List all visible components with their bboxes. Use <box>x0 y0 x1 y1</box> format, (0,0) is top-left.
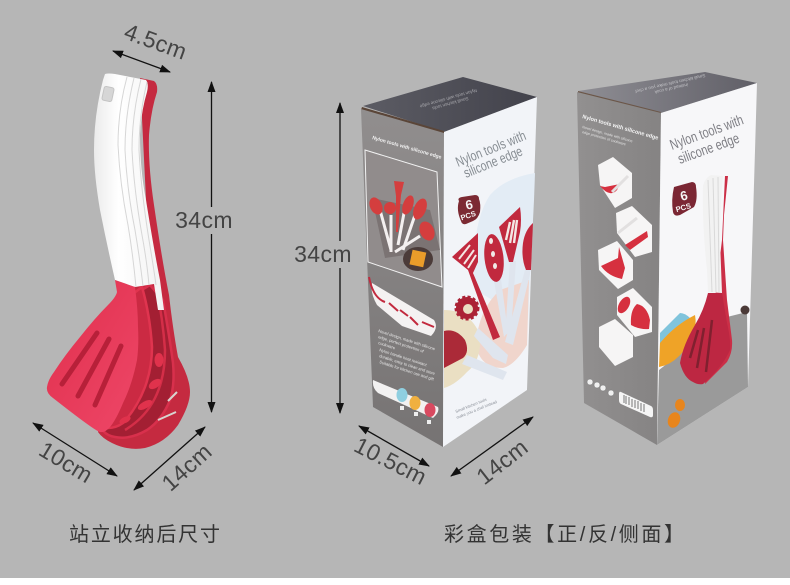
front utensils <box>444 207 533 380</box>
badge shape <box>672 182 697 216</box>
label: 10.5cm <box>350 432 431 490</box>
top line 2: Small kitchen tools <box>431 96 469 111</box>
blue leaf <box>660 313 690 350</box>
hexagon 3 <box>598 241 633 289</box>
dimension: 4.5cm width <box>113 18 191 72</box>
pale blue circle <box>474 173 535 320</box>
handle grooves <box>708 177 719 292</box>
small squares <box>400 406 431 424</box>
solid handle <box>505 270 531 345</box>
arrow <box>339 103 341 413</box>
big spoon handle <box>462 355 507 380</box>
top line 1: Small kitchen tools make you a chef <box>634 73 706 94</box>
left face heading: Nylon tools with silicone edge <box>371 135 442 161</box>
barcode label <box>619 392 653 417</box>
gear hole <box>463 304 473 314</box>
box front face <box>443 97 537 447</box>
left face subtext <box>582 125 633 146</box>
badge 6: 6 <box>679 187 689 204</box>
arrow <box>210 82 212 412</box>
peach blob <box>476 280 529 368</box>
dimension: 10.5cm <box>350 426 431 490</box>
left face heading: Nylon tools with silicone edge <box>581 114 659 142</box>
heading line 1: Nylon tools with <box>453 128 528 170</box>
label: 34cm <box>294 241 352 267</box>
heading line 2: silicone edge <box>461 143 525 181</box>
arrow <box>33 423 117 476</box>
badge PCS: PCS <box>460 209 477 222</box>
hexagon 1 <box>598 157 632 208</box>
step strip <box>372 283 436 336</box>
utensil heads <box>367 181 438 243</box>
colour box: back view <box>577 72 757 445</box>
caption left: 站立收纳后尺寸 <box>69 523 220 546</box>
arrow <box>134 427 205 490</box>
badge shape <box>458 195 480 224</box>
top faint text <box>634 73 706 95</box>
line 1: Small kitchen tools <box>455 397 487 414</box>
heading <box>667 111 746 167</box>
gear handle <box>474 328 508 364</box>
upper fruit <box>675 399 685 411</box>
icon strip <box>373 380 438 418</box>
line: edge, perfect protection of <box>378 334 425 354</box>
front slotted spatula <box>47 280 138 432</box>
gap <box>172 207 234 234</box>
white handles stack <box>94 74 164 310</box>
coloured icons <box>396 388 436 424</box>
product: stacked utensils <box>47 74 190 449</box>
stone surface <box>657 312 748 445</box>
hang hole <box>102 86 114 102</box>
arrow <box>113 51 170 72</box>
description text <box>378 328 436 382</box>
orange icon <box>410 396 420 410</box>
line: Suitable for kitchen use and gift <box>379 359 435 382</box>
dimension: 14cm <box>134 427 217 496</box>
step strip red strokes <box>369 277 434 327</box>
dimension: 14cm box <box>451 417 533 490</box>
handle layer grooves <box>118 77 156 287</box>
colour box: front view <box>361 77 537 447</box>
hexagon panels <box>598 157 652 366</box>
line: cookware <box>378 340 397 351</box>
badge 6: 6 <box>464 197 474 213</box>
small print <box>455 397 498 420</box>
label: 34cm <box>175 207 233 233</box>
hexagon 4 <box>617 288 652 337</box>
line 2: make you a chef instead <box>456 399 498 420</box>
box left face <box>577 92 661 445</box>
photo dark board <box>372 198 440 258</box>
pasta server gear <box>456 297 478 319</box>
label: 10cm <box>35 436 98 488</box>
line: Nylon handle heat resistant <box>379 347 428 368</box>
photo utensils <box>367 181 438 271</box>
top line 2: instead of a cook <box>653 82 688 95</box>
scoop <box>600 184 620 193</box>
solid spatula head <box>522 223 533 270</box>
hexagon white handle <box>612 176 637 233</box>
line: Novel design, made with silicone <box>378 328 436 352</box>
fold edge <box>578 91 661 114</box>
arrow <box>451 417 533 476</box>
utensil handles <box>380 210 420 252</box>
silicone heads <box>680 293 730 384</box>
big solid spoon <box>444 330 467 368</box>
back utensil <box>98 78 190 449</box>
arrow <box>359 426 429 466</box>
silicone head <box>601 247 625 279</box>
head dark detail <box>690 320 712 372</box>
label: 14cm <box>471 434 533 490</box>
heading line 1: Nylon tools with <box>667 111 746 153</box>
dimension: 34cm height (box) <box>292 103 354 413</box>
spoon holes <box>118 353 164 425</box>
heading <box>453 128 528 181</box>
label: 14cm <box>156 438 217 496</box>
spoon holes <box>489 238 497 269</box>
toast <box>409 250 426 267</box>
box left face <box>361 109 444 447</box>
badge PCS: PCS <box>675 201 692 214</box>
spatula slots <box>506 220 517 243</box>
stone photo <box>365 150 442 287</box>
top line 1: Nylon tools with silicone edge <box>419 88 477 109</box>
cream circle <box>444 310 480 388</box>
berry top right <box>740 306 750 314</box>
orange fruit <box>666 399 685 430</box>
slotted turner <box>452 233 500 340</box>
line: Novel design, made with silicone <box>582 125 633 143</box>
lower fruit <box>666 410 682 430</box>
orange leaf <box>659 315 696 367</box>
silver glints <box>158 392 177 420</box>
label: 4.5cm <box>121 18 191 65</box>
standing utensils <box>680 175 732 384</box>
red icon <box>424 403 436 417</box>
line: edge protection of cookware <box>582 130 626 146</box>
top faint text <box>419 88 477 111</box>
blue icon <box>396 388 408 402</box>
turner slots <box>459 245 476 268</box>
care icons <box>587 379 614 396</box>
hexagon red details <box>600 184 650 329</box>
gap <box>292 241 354 268</box>
box front face <box>657 83 757 445</box>
6 PCS badge <box>672 182 697 216</box>
caption right: 彩盒包装【正/反/侧面】 <box>444 523 684 546</box>
layer A <box>108 287 152 428</box>
red back utensil <box>705 176 732 384</box>
hexagon 2 <box>616 206 652 257</box>
box top <box>363 77 537 132</box>
dimension: 10cm <box>33 423 117 488</box>
spoon head <box>615 295 633 315</box>
spatula head <box>499 207 521 262</box>
layer B <box>103 285 174 438</box>
dome <box>631 304 650 329</box>
6 PCS badge <box>458 195 480 224</box>
barcode bars <box>624 395 644 412</box>
spoon head <box>482 233 506 283</box>
spoon handle <box>494 279 508 337</box>
white handles <box>703 175 723 293</box>
dimension: 34cm height (product) <box>172 82 234 412</box>
handle detail <box>625 231 648 250</box>
line: durable, easy to clean and store <box>379 353 436 376</box>
spatula handle <box>505 261 516 335</box>
hexagon 5 <box>599 319 633 366</box>
layer C line <box>125 285 165 430</box>
heading line 2: silicone edge <box>675 129 742 167</box>
box fold edge <box>361 107 444 134</box>
box top <box>578 72 757 113</box>
plate <box>403 247 433 271</box>
spatula slots <box>62 333 121 405</box>
nested utensil rims <box>103 285 174 438</box>
